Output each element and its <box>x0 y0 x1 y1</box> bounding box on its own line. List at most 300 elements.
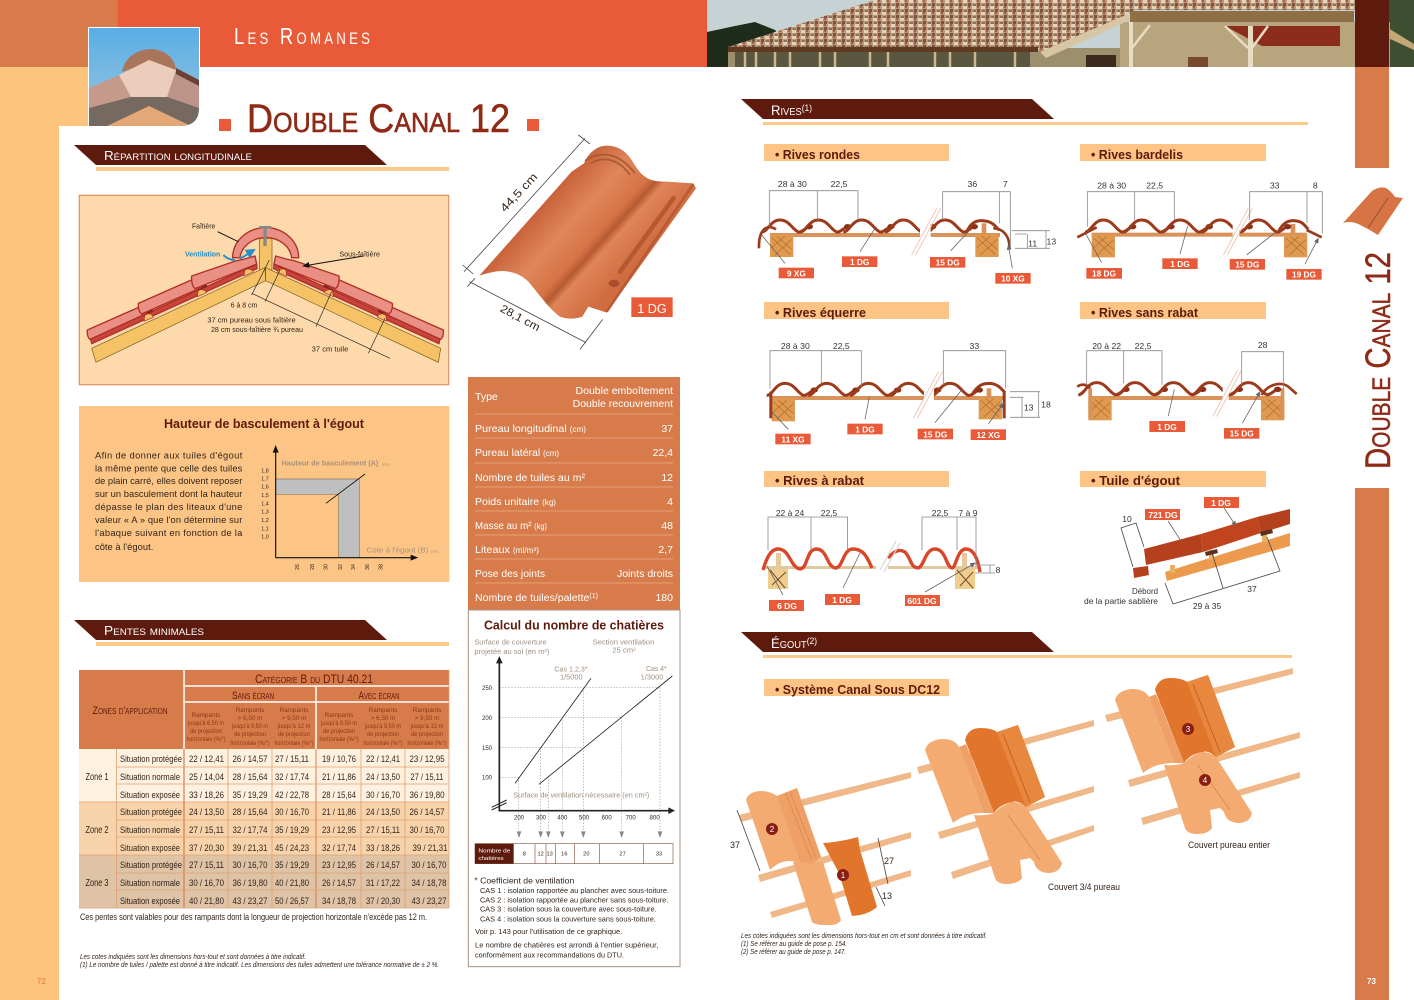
diagram: rives à rabat: 22,5 <box>821 508 838 518</box>
panel paragraph: côte à l'égout. <box>95 542 153 552</box>
roof labels: 6 à 8 cm <box>231 303 258 310</box>
diagram: rives rondes: 36 <box>968 179 977 189</box>
table heading: zones: Zones d'application <box>92 705 168 717</box>
notes: CAS 3 : isolation sous la couverture avec sous-toiture. <box>480 907 657 914</box>
chart: ventilation: Section ventilation <box>593 640 654 647</box>
abaque chart: 1,0 <box>261 535 269 541</box>
marker 1: 1 <box>841 871 846 880</box>
nombre de chatières table: 13 <box>547 852 553 858</box>
abaque chart: 38 <box>379 564 385 570</box>
spec rows: Liteaux (ml/m²) <box>475 544 539 556</box>
diagram: rives équerre: 11 XG <box>781 434 805 444</box>
column heads: jusqu'à 6,50 m <box>320 720 357 727</box>
abaque chart: 1,2 <box>261 518 269 524</box>
situation labels: Situation exposée <box>120 896 180 907</box>
nombre de chatières table: 20 <box>583 852 589 858</box>
diagram: canal step 1 <box>730 772 911 925</box>
abaque chart: 1,8 <box>261 468 269 474</box>
spec rows: Nombre de tuiles au m² <box>475 472 585 484</box>
heading: Calcul du nombre de chatières <box>484 618 664 632</box>
nombre de chatières table: 27 <box>620 852 626 858</box>
section header: répartition longitudinale: Répartition longitudinale <box>104 149 252 163</box>
marker 3 <box>1182 723 1194 735</box>
chart: ventilation: 200 <box>514 815 525 821</box>
notes: CAS 1 : isolation rapportée au plancher avec sous-toiture. <box>480 888 669 895</box>
diagram: rives équerre: 28 à 30 <box>781 341 810 351</box>
label 1 DG <box>631 297 673 317</box>
table values: 27 / 15,11 <box>189 825 224 836</box>
right tab: small tile icon <box>1343 187 1403 235</box>
ridge bolt <box>259 226 271 246</box>
chart: ventilation: Surface de ventilation nécessaire (en cm²) <box>513 792 649 799</box>
diagram: rives bardelis: 19 DG <box>1292 270 1316 280</box>
diagram: rives rondes: 28 à 30 <box>778 179 807 189</box>
nombre de chatières table: 16 <box>561 852 567 858</box>
dimension 28,1 cm <box>467 278 603 349</box>
diagram: canal step 1: 13 <box>882 891 892 901</box>
column heads: de projection <box>367 731 399 738</box>
table values: 35 / 19,29 <box>275 825 309 836</box>
background band: left column <box>0 67 88 1000</box>
table: pentes minimales <box>79 670 449 908</box>
subheading: rives rondes: • Rives rondes <box>775 148 860 162</box>
marker 3: 3 <box>1186 725 1191 734</box>
diagram: rives sans rabat: 28 <box>1258 340 1268 350</box>
table values: 43 / 23,27 <box>232 896 268 907</box>
chart: ventilation: 600 <box>602 815 612 821</box>
chart: ventilation: 1/5000 <box>560 674 583 681</box>
table values: 24 / 13,50 <box>366 772 400 783</box>
situation labels: Situation exposée <box>120 790 180 801</box>
spec rows: 4 <box>667 496 673 508</box>
chart: ventilation: 300 <box>536 815 547 821</box>
spec rows: 2,7 <box>658 544 673 556</box>
diagram: rives sans rabat <box>1077 340 1297 439</box>
roof labels: Ventilation <box>185 252 220 259</box>
table values: 26 / 14,57 <box>232 754 268 765</box>
right tab: dark top <box>1355 0 1389 67</box>
table values: 28 / 15,64 <box>232 772 268 783</box>
diagram: rives bardelis: 22,5 <box>1146 180 1163 190</box>
zone labels: Zone 1 <box>86 772 109 783</box>
notes <box>474 876 669 959</box>
column heads: horizontale (%/°) <box>408 739 446 747</box>
table values: 21 / 11,86 <box>322 807 356 818</box>
left rafter <box>92 268 266 362</box>
table values: 39 / 21,31 <box>232 843 268 854</box>
diagram: tuile d'égout <box>1084 497 1290 611</box>
table values: 33 / 18,26 <box>189 790 224 801</box>
chart: ventilation: 400 <box>557 815 568 821</box>
subheading: rives équerre: • Rives équerre <box>775 306 866 320</box>
column heads: de projection <box>234 731 266 738</box>
chart: ventilation: 800 <box>650 815 660 821</box>
table values: 40 / 21,80 <box>275 878 309 889</box>
roof labels: Faîtière <box>192 224 215 231</box>
table values: 26 / 14,57 <box>322 878 356 889</box>
panel: roof ridge cross-section <box>79 195 449 385</box>
left tiles <box>87 256 257 344</box>
diagram: rives à rabat: 7 à 9 <box>959 508 978 518</box>
nombre de chatières table: 8 <box>523 852 526 858</box>
table values: 43 / 23,27 <box>412 896 446 907</box>
caption: couvert pureau entier: Couvert pureau entier <box>1188 840 1270 850</box>
diagram: canal step 3 <box>1105 668 1300 834</box>
table values: 34 / 18,78 <box>322 896 356 907</box>
panel: calcul du nombre de chatières <box>468 610 680 967</box>
page number 73: 73 <box>1367 977 1376 986</box>
column heads: de projection <box>190 728 222 735</box>
section header: pentes minimales: Pentes minimales <box>104 624 204 638</box>
tile body <box>479 146 696 319</box>
section header: pentes minimales <box>74 620 449 646</box>
diagram: tuile d'égout: 10 <box>1122 514 1132 524</box>
table values: 19 / 10,76 <box>322 754 356 765</box>
column heads: > 6,50 m <box>371 715 395 722</box>
upper canal tile <box>746 788 821 870</box>
situation labels: Situation exposée <box>120 843 180 854</box>
spec rows: Type <box>475 391 498 403</box>
diagram: rives sans rabat: 15 DG <box>1230 429 1254 439</box>
nombre de chatières table: 12 <box>538 852 544 858</box>
section header: égout: (2) <box>807 636 817 646</box>
notes: Le nombre de chatières est arrondi à l'entier supérieur, <box>475 942 658 949</box>
table values: 28 / 15,64 <box>232 807 268 818</box>
label 1 DG: 1 DG <box>637 302 667 316</box>
spec rows: 48 <box>661 520 673 532</box>
column heads: jusqu'à 12 m <box>410 723 444 730</box>
subheading: tuile d'égout: • Tuile d'égout <box>1091 474 1181 488</box>
table values: 35 / 19,29 <box>232 790 268 801</box>
subheading: rives sans rabat <box>1080 302 1266 320</box>
spec rows: Nombre de tuiles/palette <box>475 592 589 604</box>
diagram: rives bardelis: 18 DG <box>1092 269 1116 279</box>
subheading: tuile d'égout <box>1080 471 1266 488</box>
abaque chart: 32 <box>338 564 344 570</box>
table values: 21 / 11,86 <box>322 772 356 783</box>
table note: Ces pentes sont valables pour des rampants dont la longueur de projection horizontale n'excède pas 12 m. <box>80 912 427 922</box>
column heads <box>186 707 446 747</box>
roof labels: 37 cm pureau sous faîtière <box>207 318 296 325</box>
dimension lines <box>252 260 390 358</box>
light lower tile <box>1164 752 1252 834</box>
table values: 27 / 15,11 <box>189 860 224 871</box>
diagram: rives rondes <box>759 179 1056 284</box>
nombre de chatières table <box>475 844 673 864</box>
table values: 31 / 17,22 <box>366 878 400 889</box>
subheading: système canal sous DC12: • Système Canal Sous DC12 <box>775 683 940 697</box>
chart: ventilation: 25 cm² <box>612 647 636 654</box>
dimension 44,5 cm: 44,5 cm <box>498 171 540 215</box>
table values: 22 / 12,41 <box>366 754 400 765</box>
panel paragraph: la même pente que celle des tuiles <box>95 463 243 473</box>
roof labels: 28 cm sous-faîtière ¾ pureau <box>211 327 303 334</box>
table values: 35 / 19,29 <box>275 860 309 871</box>
marker 2: 2 <box>770 825 775 834</box>
table values: 39 / 21,31 <box>412 843 448 854</box>
nombre de chatières table: Nombre de <box>478 848 510 854</box>
orange tile <box>965 725 1045 813</box>
orange tile <box>1155 675 1235 763</box>
subheading: rives à rabat <box>764 471 949 488</box>
diagram: rives rondes: 22,5 <box>831 179 848 189</box>
diagram: canal step 1: 27 <box>884 856 894 866</box>
spec rows: Masse au m² (kg) <box>475 520 547 532</box>
table values: 23 / 12,95 <box>322 825 356 836</box>
column heads: Rampants <box>280 707 308 714</box>
right tab: vertical title: Double Canal 12 <box>1359 252 1398 469</box>
photo: ridge tile close-up <box>88 27 200 127</box>
spec rows <box>475 385 673 604</box>
table values: 40 / 21,80 <box>189 896 224 907</box>
panel paragraph: l'abaque suivant en fonction de la <box>95 528 243 538</box>
tile head ridges <box>585 155 635 175</box>
column heads: horizontale (%/°) <box>186 735 226 743</box>
diagram: rives rondes: 11 <box>1028 238 1037 248</box>
diagram: rives rondes: 10 XG <box>1001 274 1025 284</box>
lower canal tile <box>793 862 841 925</box>
column heads: horizontale (%/°) <box>230 739 270 747</box>
table values: 32 / 17,74 <box>275 772 309 783</box>
diagram: rives à rabat: 601 DG <box>907 596 937 606</box>
diagram: rives bardelis: 33 <box>1270 180 1280 190</box>
panel: caractéristiques <box>468 377 680 610</box>
title bullet right <box>527 119 539 131</box>
situation labels: Situation protégée <box>120 807 182 818</box>
diagram: rives rondes: 1 DG <box>850 257 869 267</box>
column heads: > 9,50 m <box>415 715 439 722</box>
table values: 28 / 15,64 <box>322 790 356 801</box>
diagram: rives rondes: 15 DG <box>936 258 960 268</box>
diagram: rives sans rabat: 22,5 <box>1135 341 1152 351</box>
abaque chart: 1,6 <box>261 485 269 491</box>
footnote right: Les cotes indiquées sont les dimensions hors-tout en cm et sont données à titre indicatif. <box>741 933 987 940</box>
abaque chart: Cote à l'égout (B) <box>367 548 428 555</box>
chart: ventilation: projetée au sol (en m²) <box>474 649 549 656</box>
spec rows: (1) <box>589 593 598 600</box>
abaque chart: 30 <box>324 564 330 570</box>
panel paragraph: dépasse le plan des liteaux d'une <box>95 502 242 512</box>
diagram: rives à rabat: 22,5 <box>932 508 949 518</box>
diagram: rives équerre: 18 <box>1041 399 1051 409</box>
table values: 24 / 13,50 <box>189 807 224 818</box>
footnote right <box>741 933 987 956</box>
abaque chart: 1,7 <box>261 477 269 483</box>
roof labels <box>185 224 380 353</box>
column heads: horizontale (%/°) <box>320 735 358 743</box>
roof labels: 37 cm tuile <box>312 346 348 353</box>
situation labels: Situation normale <box>120 878 180 889</box>
ventilation arrows <box>223 250 254 260</box>
notes: conformément aux recommandations du DTU. <box>475 952 624 959</box>
spec rows: Pureau latéral (cm) <box>475 447 559 459</box>
column heads: horizontale (%/°) <box>274 739 314 747</box>
section header: rives: (1) <box>802 103 812 113</box>
spec rows: 22,4 <box>653 447 673 459</box>
section header: rives: Rives <box>771 102 804 118</box>
table values: 36 / 19,80 <box>232 878 268 889</box>
column heads: > 9,50 m <box>282 715 306 722</box>
nombre de chatières table: chatières <box>478 856 504 862</box>
table values: 33 / 18,26 <box>366 843 400 854</box>
panel paragraph: valeur « A » que l'on détermine sur <box>95 515 242 525</box>
photo: building with tiled roof <box>707 0 1414 67</box>
subheading: rives rondes <box>764 144 949 162</box>
situation labels: Situation normale <box>120 825 180 836</box>
column heads: > 6,50 m <box>238 715 262 722</box>
diagram: rives équerre: 15 DG <box>923 429 947 439</box>
diagram: rives rondes: 13 <box>1047 236 1056 246</box>
spec rows: Double recouvrement <box>573 398 673 410</box>
table values: 36 / 19,80 <box>410 790 444 801</box>
zone labels <box>86 772 109 889</box>
situation labels: Situation protégée <box>120 754 182 765</box>
title bullet left <box>219 119 231 131</box>
table heading: avec écran: Avec écran <box>358 690 400 702</box>
column heads: Rampants <box>369 707 397 714</box>
table values: 26 / 14,57 <box>366 860 400 871</box>
table values: 30 / 16,70 <box>412 860 446 871</box>
chart: ventilation: Surface de couverture <box>474 640 547 647</box>
column heads: Rampants <box>413 707 441 714</box>
section header: répartition longitudinale <box>74 145 449 171</box>
spec rows: Poids unitaire (kg) <box>475 496 556 508</box>
diagram: tuile d'égout: 1 DG <box>1211 498 1231 508</box>
abaque chart: 36 <box>365 564 371 570</box>
table values: 30 / 16,70 <box>232 860 268 871</box>
table values: 30 / 16,70 <box>275 807 309 818</box>
spec rows: 37 <box>661 423 673 435</box>
diagram: rives à rabat <box>763 508 1001 611</box>
abaque chart: (cm) <box>431 549 439 554</box>
light upper tile <box>1115 689 1174 773</box>
main title <box>219 97 539 141</box>
column heads: jusqu'à 9,50 m <box>364 723 401 730</box>
diagram: rives bardelis <box>1077 180 1322 280</box>
dimension 28,1 cm: 28,1 cm <box>498 303 542 334</box>
diagram: canal step 2 <box>917 720 1094 884</box>
light upper tile <box>925 739 984 823</box>
nombre de chatières table: 33 <box>656 852 662 858</box>
marker 1 <box>837 869 849 881</box>
table values: 45 / 24,23 <box>275 843 309 854</box>
table values: 24 / 13,50 <box>366 807 400 818</box>
table values: 30 / 16,70 <box>366 790 400 801</box>
diagram: rives bardelis: 1 DG <box>1170 259 1190 269</box>
leaders <box>218 232 363 266</box>
column heads: jusqu'à 9,50 m <box>231 723 268 730</box>
diagram: rives à rabat: 6 DG <box>777 601 797 611</box>
column heads: horizontale (%/°) <box>364 739 402 747</box>
header band <box>118 0 707 67</box>
subheading: rives bardelis <box>1080 144 1266 162</box>
section header: égout: Égout <box>771 635 809 651</box>
subheading: rives équerre <box>764 302 949 320</box>
diagram: rives équerre: 13 <box>1024 403 1034 413</box>
diagram: rives à rabat: 22 à 24 <box>776 508 804 518</box>
abaque chart <box>261 445 439 570</box>
diagram: rives sans rabat: 1 DG <box>1157 422 1177 432</box>
dimension 44,5 cm <box>463 135 590 274</box>
chart: ventilation <box>474 640 675 838</box>
column heads: de projection <box>323 728 355 735</box>
situation labels: Situation normale <box>120 772 180 783</box>
chart: ventilation: Cas 1,2,3* <box>554 667 588 674</box>
right rafter <box>266 268 441 362</box>
column heads: jusqu'à 12 m <box>277 723 310 730</box>
diagram: rives équerre: 1 DG <box>855 424 875 434</box>
table values: 34 / 18,78 <box>412 878 446 889</box>
background band: top left square <box>0 0 118 67</box>
footnote right: (1) Se référer au guide de pose p. 154. <box>741 941 847 948</box>
right tab: orange lower <box>1355 488 1389 1000</box>
section header: rives <box>741 99 1308 125</box>
table values: 50 / 26,57 <box>275 896 309 907</box>
tile groove <box>620 198 673 272</box>
table values: 30 / 16,70 <box>410 825 444 836</box>
situation labels: Situation protégée <box>120 860 182 871</box>
subheading: rives à rabat: • Rives à rabat <box>775 474 865 488</box>
column heads: Rampants <box>236 707 264 714</box>
diagram: rives équerre: 33 <box>970 341 979 351</box>
diagram: rives rondes: 9 XG <box>787 268 806 278</box>
diagram: rives bardelis: 8 <box>1313 181 1318 191</box>
panel paragraph <box>95 450 243 552</box>
notes: * Coefficient de ventilation <box>474 876 574 885</box>
notes: Voir p. 143 pour l'utilisation de ce graphique. <box>475 929 622 936</box>
column heads: Rampants <box>325 712 353 719</box>
panel paragraph: de plain carré, elles doivent reposer <box>95 476 242 486</box>
abaque chart: 34 <box>351 564 357 570</box>
caption: couvert 3/4 pureau: Couvert 3/4 pureau <box>1048 882 1120 892</box>
table values: 32 / 17,74 <box>232 825 268 836</box>
table values: 27 / 15,11 <box>410 772 444 783</box>
diagram: rives équerre: 22,5 <box>833 341 850 351</box>
diagram: tuile d'égout: 37 <box>1247 584 1257 594</box>
panel paragraph: Afin de donner aux tuiles d'égout <box>95 450 243 460</box>
diagram: rives à rabat: 8 <box>996 565 1001 575</box>
column heads: de projection <box>278 731 310 738</box>
panel heading: Hauteur de basculement à l'égout <box>164 417 365 431</box>
table values: 27 / 15,11 <box>275 754 309 765</box>
diagram: rives à rabat: 1 DG <box>832 595 852 605</box>
table values: 25 / 14,04 <box>189 772 224 783</box>
abaque chart: 1,1 <box>261 526 269 532</box>
table values: 32 / 17,74 <box>322 843 356 854</box>
abaque chart: 1,4 <box>261 501 269 507</box>
page number 72: 72 <box>37 977 46 986</box>
chart: ventilation: 700 <box>626 815 636 821</box>
table values: 23 / 12,95 <box>410 754 444 765</box>
title text: Double Canal 12 <box>247 97 510 141</box>
table values: 37 / 20,30 <box>189 843 224 854</box>
table heading: catégorie: Catégorie B du DTU 40.21 <box>255 672 373 686</box>
footnote left <box>80 952 439 969</box>
diagram: tuile d'égout: de la partie sablière <box>1084 596 1158 606</box>
spec rows: Pureau longitudinal (cm) <box>475 423 586 435</box>
chart: ventilation: 1/3000 <box>641 674 663 681</box>
header title: Les Romanes: Les Romanes <box>234 24 370 50</box>
diagram: tuile d'égout: 721 DG <box>1148 510 1178 520</box>
table values: 30 / 16,70 <box>189 878 224 889</box>
spec rows: Joints droits <box>617 568 673 580</box>
subheading: rives sans rabat: • Rives sans rabat <box>1091 306 1199 320</box>
spec rows: Pose des joints <box>475 568 545 580</box>
notes: CAS 4 : isolation sous la couverture sans sous-toiture. <box>480 916 656 923</box>
diagram: rives sans rabat: 20 à 22 <box>1092 341 1121 351</box>
diagram: rives équerre <box>767 341 1051 444</box>
light lower tile <box>974 802 1062 884</box>
